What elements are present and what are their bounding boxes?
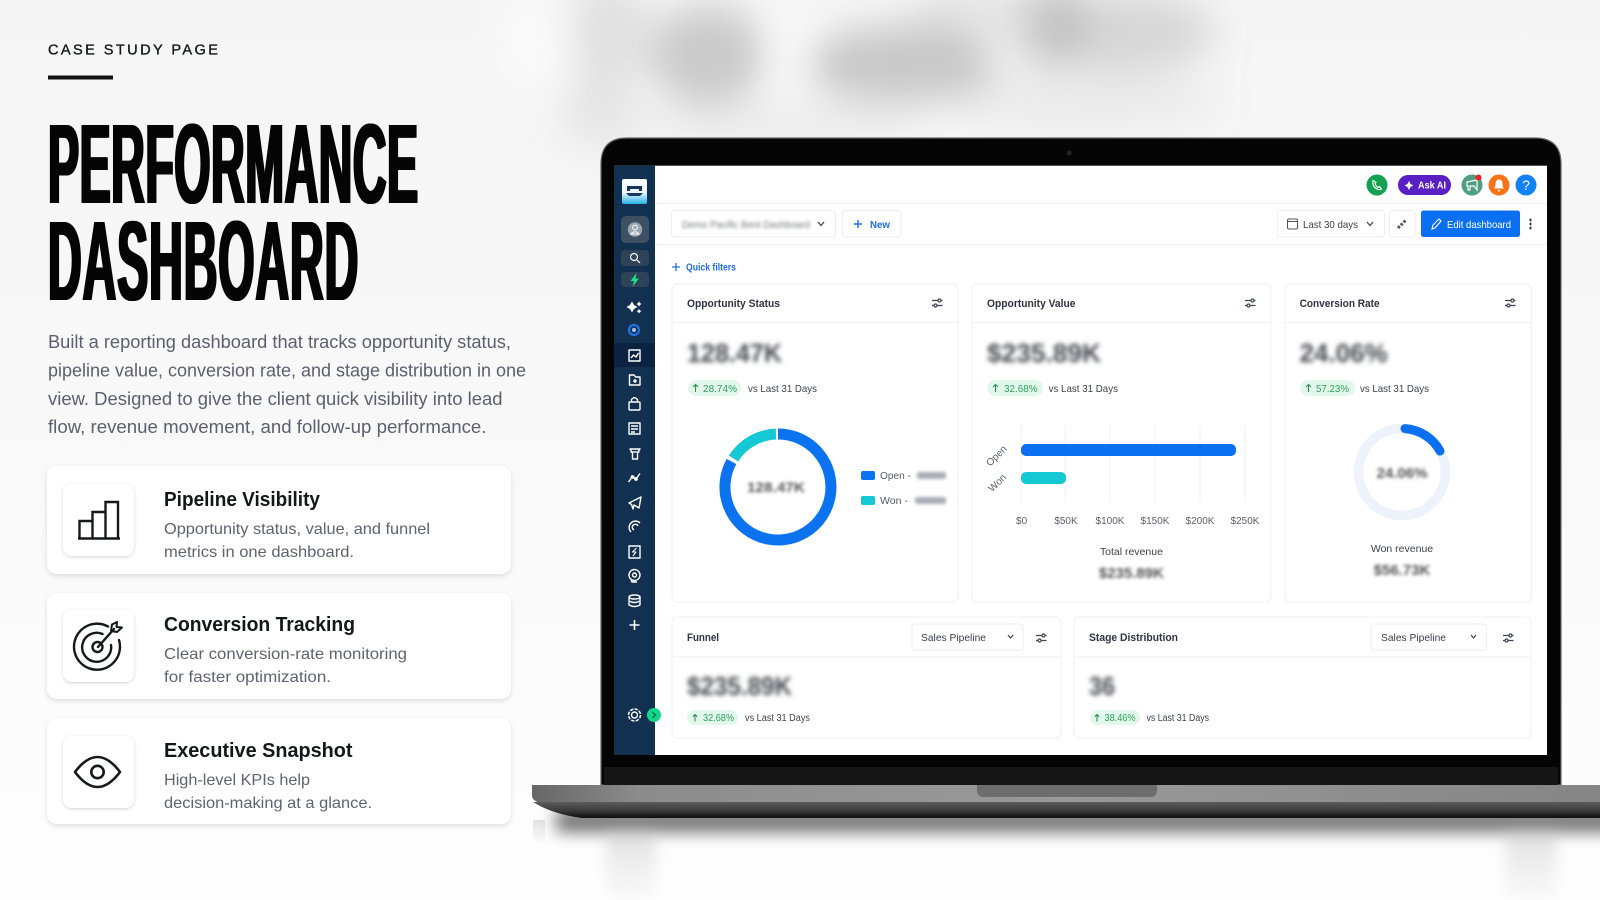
gauge chart	[1358, 428, 1446, 516]
intro paragraph: view. Designed to give the client quick visibility into lead	[48, 389, 502, 409]
webcam	[1066, 150, 1072, 156]
change badge: vs Last 31 Days	[748, 383, 817, 395]
donut chart: 128.47K	[747, 479, 805, 495]
heading: Conversion Rate	[1300, 298, 1380, 310]
heading: conversion tracking: Conversion Tracking	[164, 614, 355, 636]
total revenue: Total revenue	[1100, 546, 1163, 558]
action: ask ai	[1398, 175, 1451, 195]
panel: opportunity value	[972, 284, 1271, 602]
total revenue: $235.89K	[1099, 565, 1164, 582]
date range: Last 30 days	[1303, 219, 1358, 231]
change badge: 32.68%	[1004, 383, 1038, 395]
change badge: 32.68%	[703, 713, 734, 724]
change badge: vs Last 31 Days	[745, 713, 810, 724]
description: pipeline visibility	[164, 521, 430, 561]
horizontal bar chart: Open	[985, 444, 1010, 469]
screen	[614, 166, 1547, 755]
horizontal bar chart: $100K	[1096, 516, 1125, 527]
pipeline dropdown: Sales Pipeline	[1381, 632, 1446, 644]
change badge	[688, 380, 817, 396]
laptop notch	[977, 785, 1157, 797]
new button	[842, 210, 901, 237]
action: help: ?	[1522, 177, 1530, 193]
legend: Open -	[880, 470, 911, 482]
icon: bar chart	[63, 484, 134, 556]
horizontal bar chart: $250K	[1231, 516, 1260, 527]
total revenue	[1099, 546, 1164, 582]
change badge	[1090, 710, 1209, 725]
card: executive snapshot	[47, 718, 511, 824]
new button: New	[870, 219, 891, 231]
action: notifications	[1488, 174, 1510, 196]
heading: Opportunity Value	[987, 298, 1076, 310]
intro paragraph: pipeline value, conversion rate, and stage distribution in one	[48, 360, 526, 380]
horizontal bar chart: $50K	[1054, 516, 1078, 527]
icon: sliders	[1505, 299, 1516, 307]
sidebar expand button	[647, 708, 661, 722]
dashboard selector: Demo Pacific Bent Dashboard	[682, 219, 810, 231]
laptop mockup	[532, 138, 1600, 900]
icon: sliders	[1036, 634, 1046, 642]
heading: Opportunity Status	[687, 298, 780, 310]
title: PERFORMANCE	[48, 100, 418, 226]
change badge: 57.23%	[1316, 383, 1349, 395]
horizontal bar chart: $0	[1016, 516, 1028, 527]
action: ask ai: Ask AI	[1418, 180, 1446, 192]
more menu	[1530, 220, 1532, 228]
horizontal bar chart: Won	[987, 472, 1009, 494]
avatar	[621, 216, 649, 243]
blurred metric: $235.89K	[987, 338, 1101, 368]
blurred metric: 36	[1089, 671, 1115, 701]
card: conversion tracking	[47, 593, 511, 699]
description: executive snapshot	[164, 772, 372, 812]
search	[621, 250, 649, 266]
dashboard top bars	[655, 174, 1547, 274]
icon: sliders	[1245, 299, 1256, 307]
sidebar icons	[626, 302, 642, 721]
intro paragraph: flow, revenue movement, and follow-up performance.	[48, 417, 486, 437]
description: pipeline visibility: Opportunity status, value, and funnel	[164, 521, 430, 538]
intro paragraph	[48, 332, 526, 437]
edit dashboard button: Edit dashboard	[1447, 219, 1511, 231]
title: DASHBOARD	[48, 198, 359, 324]
change badge	[1300, 380, 1429, 396]
blurred metric: 24.06%	[1300, 338, 1388, 368]
date range	[1278, 210, 1384, 237]
action: announcements	[1462, 174, 1482, 196]
change badge	[687, 710, 810, 725]
quick filters: Quick filters	[686, 262, 736, 274]
pin button	[1390, 210, 1415, 237]
horizontal bar chart: $150K	[1141, 516, 1170, 527]
title	[48, 100, 418, 324]
pipeline dropdown	[1371, 624, 1486, 650]
change badge	[987, 380, 1118, 396]
horizontal bar chart: $200K	[1186, 516, 1215, 527]
icon: eye	[63, 736, 134, 808]
horizontal bar chart	[985, 425, 1260, 527]
change badge: vs Last 31 Days	[1360, 383, 1429, 395]
heading: executive snapshot: Executive Snapshot	[164, 740, 353, 762]
won revenue: $56.73K	[1374, 562, 1431, 579]
dashboard sidebar	[614, 166, 661, 755]
pipeline dropdown: Sales Pipeline	[921, 632, 986, 644]
legend	[861, 470, 946, 507]
panel: opportunity status	[672, 284, 958, 602]
icon: sliders	[932, 299, 942, 307]
bolt	[621, 272, 649, 287]
eyebrow rule	[48, 76, 113, 80]
heading: Stage Distribution	[1089, 632, 1178, 644]
won revenue: Won revenue	[1371, 543, 1433, 555]
donut chart	[725, 434, 831, 540]
change badge: 38.46%	[1104, 713, 1136, 724]
laptop base	[532, 785, 1600, 818]
eyebrow: case study page: CASE STUDY PAGE	[48, 42, 218, 58]
heading: Funnel	[687, 632, 719, 644]
description: executive snapshot: decision-making at a glance.	[164, 795, 372, 812]
intro paragraph: Built a reporting dashboard that tracks opportunity status,	[48, 332, 511, 352]
card: pipeline visibility	[47, 466, 511, 574]
panel: funnel	[672, 617, 1061, 738]
laptop reflection and shadow	[533, 810, 1600, 900]
icon: sliders	[1503, 634, 1514, 642]
change badge: vs Last 31 Days	[1146, 713, 1209, 724]
change badge: 28.74%	[703, 383, 737, 395]
dashboard selector	[672, 210, 836, 237]
sidebar logo	[622, 179, 647, 204]
heading: pipeline visibility: Pipeline Visibility	[164, 489, 321, 511]
description: conversion tracking: Clear conversion-rate monitoring	[164, 646, 407, 663]
gauge chart: 24.06%	[1377, 465, 1427, 482]
blurred metric: 128.47K	[687, 338, 782, 368]
pipeline dropdown	[912, 624, 1023, 650]
quick filters	[672, 262, 736, 274]
legend: Won -	[880, 495, 908, 507]
action: help	[1516, 174, 1536, 196]
panel: conversion rate	[1285, 284, 1531, 602]
laptop lid	[601, 138, 1561, 785]
description: pipeline visibility: metrics in one dashboard.	[164, 544, 354, 561]
change badge: vs Last 31 Days	[1049, 383, 1118, 395]
icon: target with arrow	[63, 610, 134, 682]
description: conversion tracking	[164, 646, 407, 686]
edit dashboard button	[1421, 210, 1520, 237]
blurred metric: $235.89K	[687, 671, 792, 701]
action: phone	[1366, 174, 1388, 196]
panel: stage distribution	[1074, 617, 1531, 738]
won revenue	[1371, 543, 1433, 579]
description: executive snapshot: High-level KPIs help	[164, 772, 310, 789]
description: conversion tracking: for faster optimization.	[164, 669, 331, 686]
